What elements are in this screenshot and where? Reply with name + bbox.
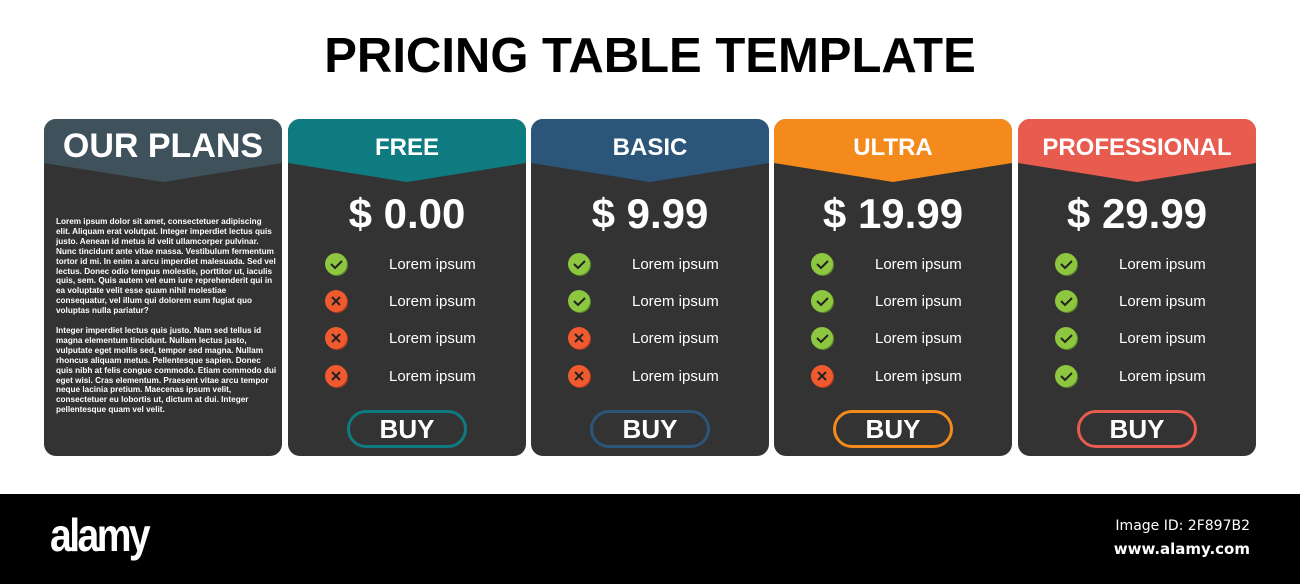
feature list: basic: Lorem ipsum [632, 256, 719, 273]
panel: ultra: ULTRA [853, 134, 933, 161]
button: buy professional: BUY [1110, 414, 1164, 444]
feature list: professional [1055, 253, 1206, 388]
feature list: free: Lorem ipsum [389, 330, 476, 347]
text: image id: Image ID: 2F897B2 [1115, 518, 1250, 534]
feature list: free: Lorem ipsum [389, 293, 476, 310]
button: buy basic: BUY [623, 414, 677, 444]
feature list: free: Lorem ipsum [389, 256, 476, 273]
feature list: ultra: Lorem ipsum [875, 330, 962, 347]
feature list: ultra [811, 253, 962, 388]
button: buy ultra [833, 410, 953, 448]
button: buy professional [1077, 410, 1197, 448]
panel: ultra [774, 119, 1012, 456]
feature list: basic: Lorem ipsum [632, 368, 719, 385]
button: buy basic [590, 410, 710, 448]
title: PRICING TABLE TEMPLATE [324, 29, 976, 83]
panel: free: FREE [375, 134, 439, 161]
feature list: professional: Lorem ipsum [1119, 293, 1206, 310]
heading: our plans: OUR PLANS [63, 127, 263, 165]
text block: description: Integer imperdiet lectus quis justo. Nam sed tellus id magna elementum tincidunt. Nullam lectus justo, vulputate eget mollis sed, tempor sed magna. Nullam rhoncus aliquam metus. Pellentesque sapien. Donec quis nibh at felis congue commodo. Etiam commodo dui eget wisi. Cras elementum. Praesent vitae arcu tempor neque lacinia pretium. Maecenas ipsum velit, consectetuer eu lobortis ut, dictum at dui. Integer pellentesque quam vel velit. [56, 326, 276, 414]
panel: basic [531, 119, 769, 456]
button: buy ultra: BUY [866, 414, 920, 444]
panel: professional: PROFESSIONAL [1042, 134, 1232, 161]
panel: our plans [44, 119, 282, 456]
feature list: ultra: Lorem ipsum [875, 293, 962, 310]
panel: professional [1018, 119, 1256, 456]
footer bar [0, 494, 1300, 584]
button: buy free [347, 410, 467, 448]
feature list: professional: Lorem ipsum [1119, 256, 1206, 273]
price: professional: $ 29.99 [1067, 190, 1207, 237]
feature list: professional: Lorem ipsum [1119, 368, 1206, 385]
feature list: professional: Lorem ipsum [1119, 330, 1206, 347]
price: ultra: $ 19.99 [823, 190, 963, 237]
price: free: $ 0.00 [349, 190, 465, 237]
feature list: basic: Lorem ipsum [632, 293, 719, 310]
feature list: basic [568, 253, 719, 388]
panel: basic: BASIC [613, 134, 687, 161]
panel: free [288, 119, 526, 456]
feature list: free [325, 253, 476, 388]
feature list: ultra: Lorem ipsum [875, 256, 962, 273]
text block: description [56, 217, 276, 414]
logo: alamy: alamy [50, 509, 148, 561]
text: url: www.alamy.com [1114, 540, 1250, 558]
feature list: free: Lorem ipsum [389, 368, 476, 385]
button: buy free: BUY [380, 414, 434, 444]
text block: description: Lorem ipsum dolor sit amet, consectetuer adipiscing elit. Aliquam erat volutpat. Integer imperdiet lectus quis justo. Aenean id metus id velit ullamcorper pulvinar. Nunc tincidunt ante vitae massa. Vestibulum fermentum tortor id mi. In enim a arcu imperdiet malesuada. Sed vel lectus. Donec odio tempus molestie, porttitor ut, iaculis quis, sem. Quis autem vel eum iure reprehenderit qui in ea voluptate velit esse quam nihil molestiae consequatur, vel illum qui dolorem eum fugiat quo voluptas nulla pariatur? [56, 217, 276, 315]
feature list: ultra: Lorem ipsum [875, 368, 962, 385]
price: basic: $ 9.99 [592, 190, 708, 237]
feature list: basic: Lorem ipsum [632, 330, 719, 347]
